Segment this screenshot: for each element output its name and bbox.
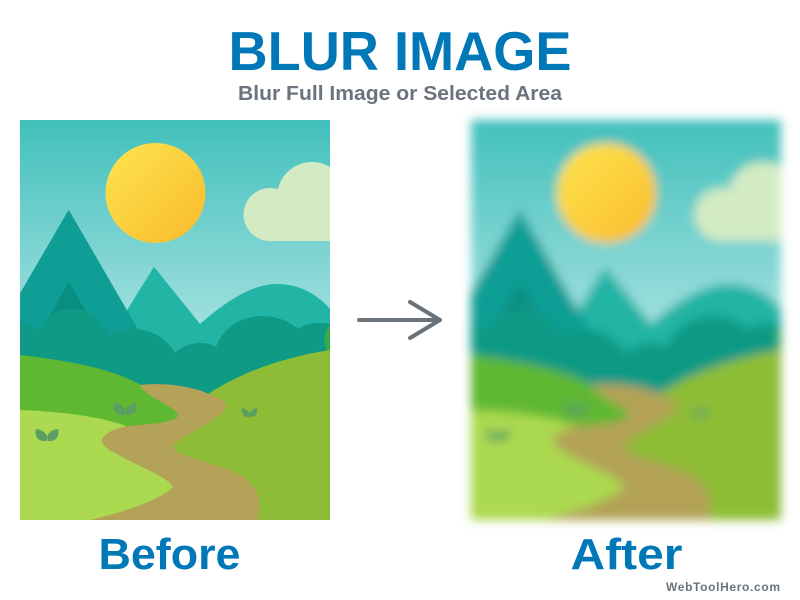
light green hill xyxy=(20,410,200,520)
title: BLUR IMAGE xyxy=(228,20,572,82)
panel: before image xyxy=(0,120,382,520)
label: before: Before xyxy=(98,530,240,579)
label: after: After xyxy=(570,530,682,579)
sky xyxy=(20,120,330,520)
panel: after image (blurred) xyxy=(441,120,800,520)
icon: sun xyxy=(106,143,206,243)
green bush sliver xyxy=(325,325,330,351)
large mountain xyxy=(0,210,150,370)
tree line xyxy=(20,309,330,410)
icon: cloud xyxy=(244,160,382,241)
winding path xyxy=(90,384,260,520)
dark green hill xyxy=(20,355,179,440)
icon: sprout left xyxy=(35,429,59,441)
icon: sprout right xyxy=(242,408,257,417)
subtitle: Blur Full Image or Selected Area xyxy=(238,83,563,105)
arrow xyxy=(359,302,440,338)
small mountain xyxy=(90,267,215,370)
inner mountain peak xyxy=(33,282,105,345)
distant hill xyxy=(195,284,330,370)
watermark: WebToolHero.com xyxy=(666,580,780,594)
right green hill xyxy=(170,350,330,520)
icon: sprout centre xyxy=(113,403,137,415)
